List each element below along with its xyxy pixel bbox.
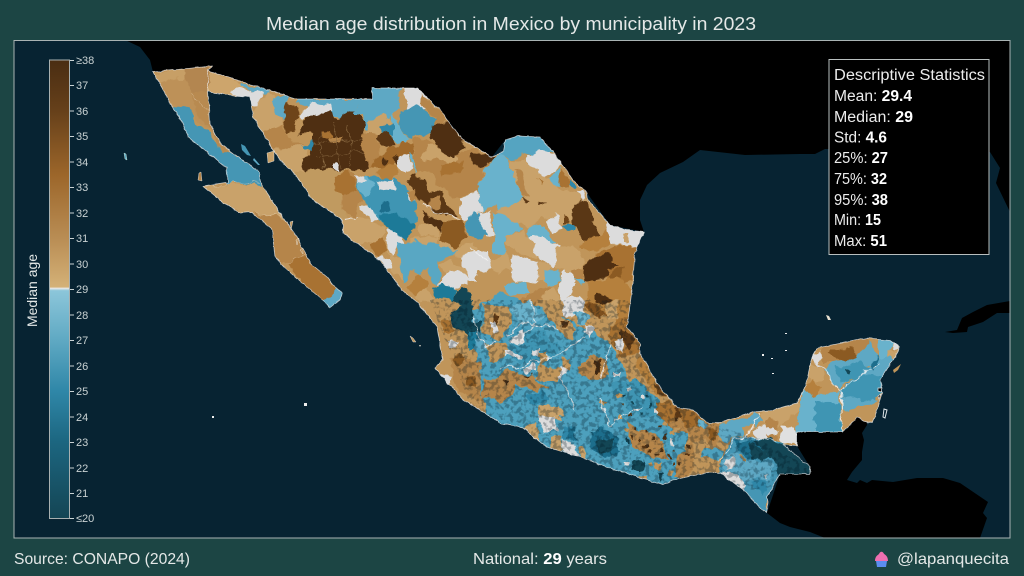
colour bar labels: 37 [76, 80, 88, 92]
base land colour [140, 60, 920, 520]
neighbouring land: United States [125, 40, 1010, 232]
colour bar labels: 35 [76, 131, 88, 143]
colour bar labels: 22 [76, 463, 88, 475]
islands [124, 144, 901, 418]
region: Zacatecas [405, 172, 487, 257]
colour bar title: Median age [24, 254, 40, 327]
colour bar labels: 33 [76, 182, 88, 194]
colour bar labels: 28 [76, 310, 88, 322]
choropleth map of Mexico [140, 60, 920, 520]
region: Nayarit, Jalisco and western states [398, 242, 493, 330]
colour bar labels: 27 [76, 335, 88, 347]
colour bar labels: 36 [76, 106, 88, 118]
colour bar labels: 31 [76, 233, 88, 245]
municipal mottling: central and southern Mexico [430, 300, 830, 500]
neighbouring land: Guatemala, Belize and Central America [767, 417, 988, 538]
statistics values: 95%: 38 [834, 192, 888, 209]
statistics heading: Descriptive Statistics [834, 67, 985, 84]
colour bar labels: 30 [76, 259, 88, 271]
statistics values [834, 88, 913, 250]
colour bar labels: 24 [76, 412, 88, 424]
footer: source: Source: CONAPO (2024) [14, 551, 190, 568]
neighbouring land: Cuba [945, 301, 1010, 333]
region: central highlands [460, 193, 587, 320]
statistics values: 25%: 27 [834, 150, 888, 167]
colour bar labels: 29 [76, 284, 88, 296]
statistics box [829, 60, 989, 254]
colour bar labels: ≤20 [76, 513, 94, 525]
icon: cupcake [875, 552, 888, 567]
region: Guerrero coast [523, 390, 586, 459]
region: central and southern base [467, 291, 688, 484]
region: Veracruz [610, 317, 720, 447]
statistics values: Std: 4.6 [834, 130, 887, 146]
region: Yucatan [812, 339, 880, 390]
region: Coahuila [353, 85, 495, 197]
colour bar labels: 21 [76, 488, 88, 500]
statistics values: Median: 29 [834, 109, 913, 126]
region: Baja California [153, 66, 346, 312]
region: Quintana Roo [840, 340, 898, 412]
region: Sonora [208, 71, 310, 178]
region: Durango and Sinaloa [292, 168, 417, 277]
state boundary lines [345, 205, 880, 460]
statistics values: Max: 51 [834, 233, 887, 250]
coastline outline of Mexico [153, 66, 900, 513]
region: Tabasco and Chiapas north [702, 403, 800, 460]
colour bar labels: 32 [76, 208, 88, 220]
region: Jalisco and Colima coast [417, 297, 510, 420]
region: Chihuahua [297, 99, 372, 173]
colour bar labels: 34 [76, 157, 88, 169]
footer: national median: National: 29 years [473, 551, 607, 568]
region: Campeche [797, 363, 842, 436]
colour bar labels: 23 [76, 437, 88, 449]
colour bar legend [24, 55, 94, 525]
statistics values: Min: 15 [834, 212, 881, 229]
region: Bajio and central plateau [483, 300, 613, 403]
region: Nuevo Leon and Tamaulipas [478, 132, 650, 320]
panel: descriptive statistics [829, 60, 989, 254]
statistics values: 75%: 32 [834, 171, 887, 188]
region: Chiapas [718, 436, 810, 512]
statistics values: Mean: 29.4 [834, 88, 912, 105]
title: Median age distribution in Mexico by municipality in 2023 [266, 14, 756, 34]
region: Oaxaca [592, 372, 695, 485]
colour bar labels [76, 55, 94, 525]
colour bar ticks [70, 60, 74, 518]
colour bar labels: ≥38 [76, 55, 94, 67]
colour bar [50, 60, 70, 518]
colour bar labels: 25 [76, 386, 88, 398]
colour bar labels: 26 [76, 361, 88, 373]
footer: author handle: @lapanquecita [897, 551, 1009, 568]
